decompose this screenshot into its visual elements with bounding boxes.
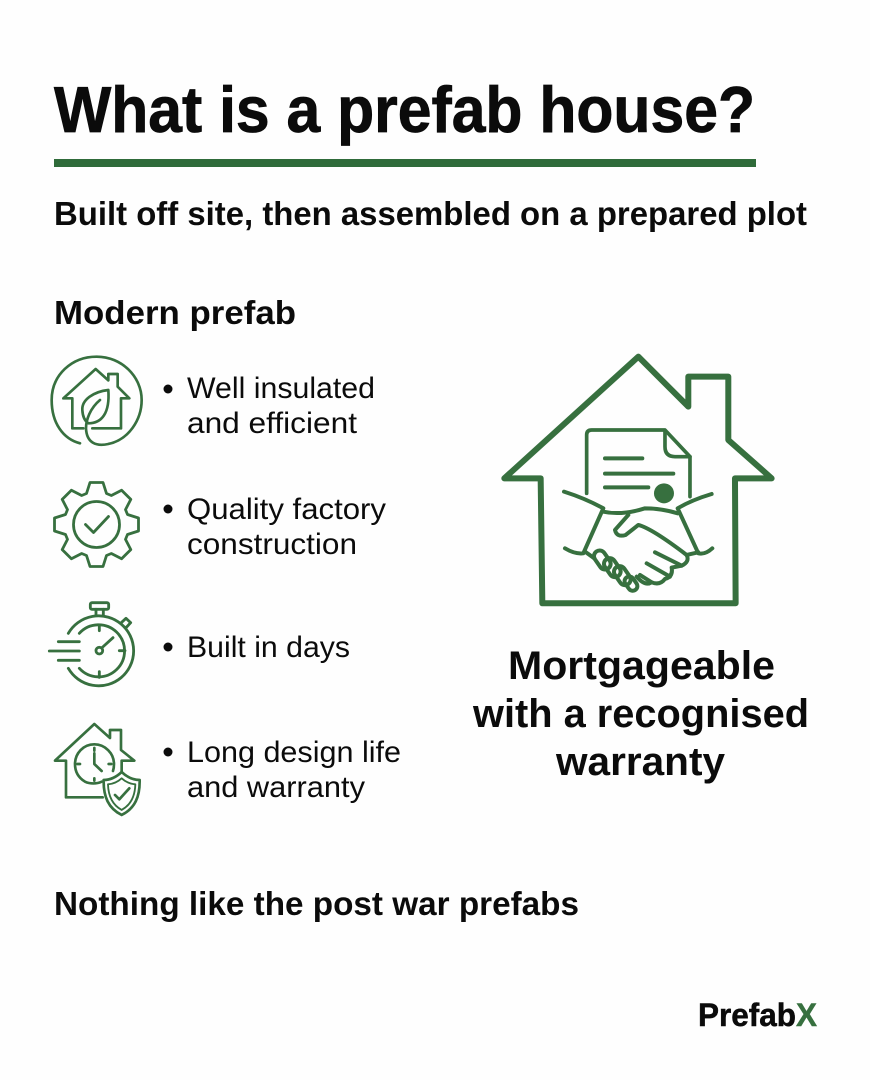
bullet: quality factory construction: Quality factory bbox=[187, 493, 386, 526]
logo: PrefabX: PrefabX bbox=[698, 997, 818, 1033]
subtitle: Built off site, then assembled on a prepared plot bbox=[54, 196, 807, 233]
icon: house with clock and shield bbox=[55, 724, 140, 815]
bullet: quality factory construction bbox=[164, 493, 386, 561]
callout: mortgageable with a recognised warranty: Mortgageable bbox=[508, 644, 775, 688]
callout: mortgageable with a recognised warranty: with a recognised bbox=[472, 692, 809, 736]
bullet: well insulated bbox=[164, 372, 375, 440]
bullet: built in days: Built in days bbox=[187, 631, 350, 664]
icon: stopwatch bbox=[49, 603, 134, 686]
title underline bbox=[54, 159, 756, 167]
bullet: well insulated: and efficient bbox=[187, 407, 357, 440]
callout: mortgageable with a recognised warranty: warranty bbox=[555, 740, 725, 784]
closing statement: Nothing like the post war prefabs bbox=[54, 886, 579, 923]
title: What is a prefab house? bbox=[54, 73, 755, 146]
bullet: well insulated: Well insulated bbox=[187, 372, 375, 405]
callout: mortgageable with a recognised warranty bbox=[472, 644, 809, 784]
bullet: long design life and warranty: and warranty bbox=[187, 771, 365, 804]
bullet: long design life and warranty: Long design life bbox=[187, 736, 401, 769]
bullet: quality factory construction: construction bbox=[187, 528, 357, 561]
heading: modern prefab: Modern prefab bbox=[54, 295, 296, 332]
icon: house with document and handshake bbox=[504, 357, 772, 603]
bullet: long design life and warranty bbox=[164, 736, 401, 804]
icon: house with leaf bbox=[52, 357, 142, 445]
icon: gear with check bbox=[54, 482, 138, 566]
